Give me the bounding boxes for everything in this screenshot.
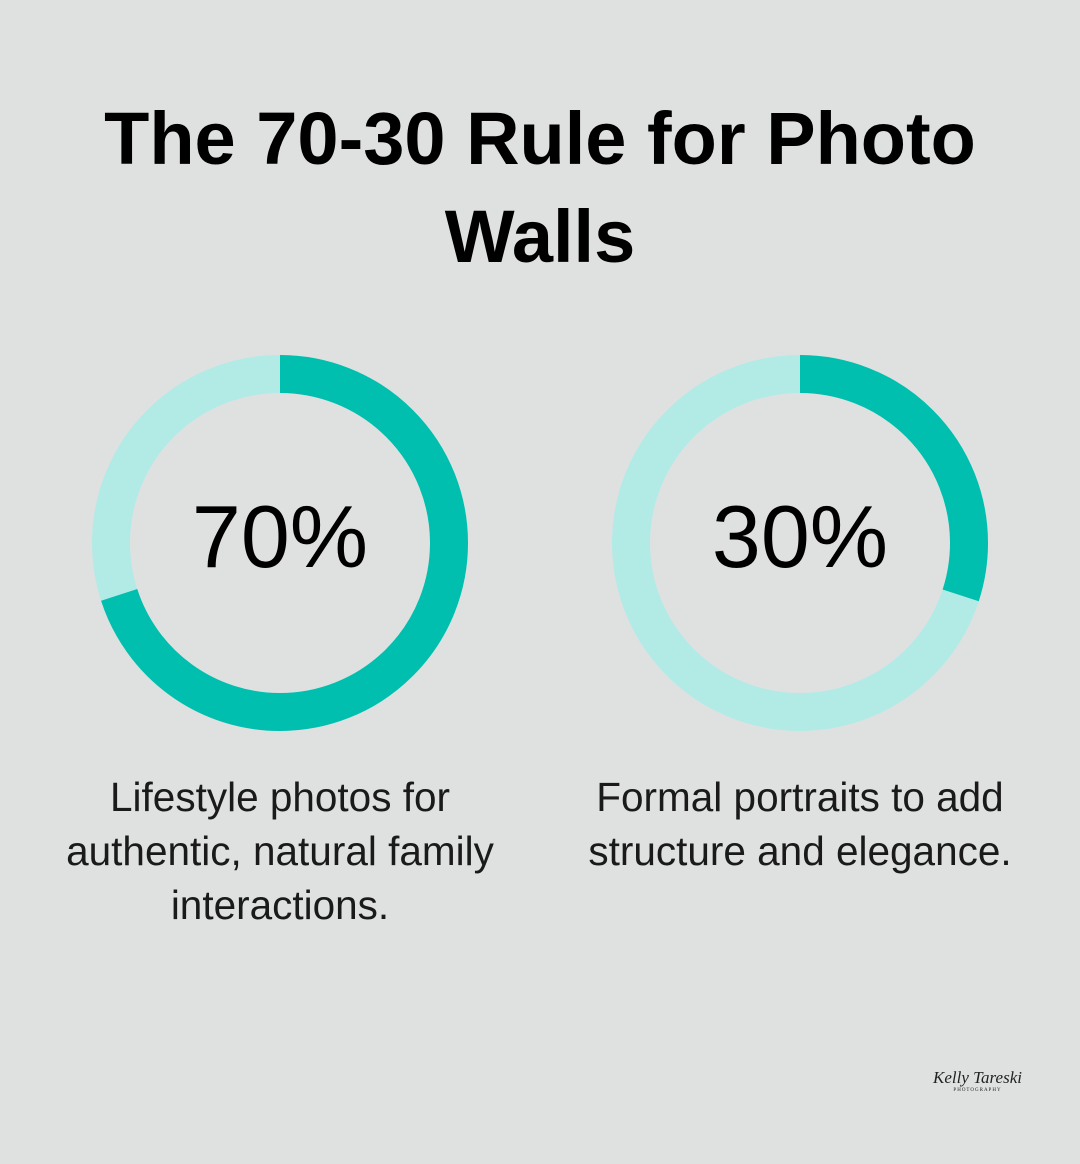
caption 70: authentic, natural family (66, 828, 494, 874)
donut ring 70 (111, 374, 449, 712)
title: The 70-30 Rule for Photo (104, 97, 976, 180)
logo: Kelly Tareski (933, 1068, 1022, 1087)
caption 30: Formal portraits to add (596, 774, 1004, 820)
logo: PHOTOGRAPHY (953, 1088, 1002, 1093)
caption 30: structure and elegance. (588, 828, 1012, 874)
caption 30 (588, 774, 1012, 874)
donut ring 30 (631, 374, 969, 712)
title (104, 97, 976, 278)
title: Walls (445, 195, 635, 278)
caption 70: Lifestyle photos for (110, 774, 450, 820)
value 70%: 70% (192, 487, 368, 586)
caption 70: interactions. (171, 882, 389, 928)
value 30%: 30% (712, 487, 888, 586)
caption 70 (66, 774, 494, 928)
